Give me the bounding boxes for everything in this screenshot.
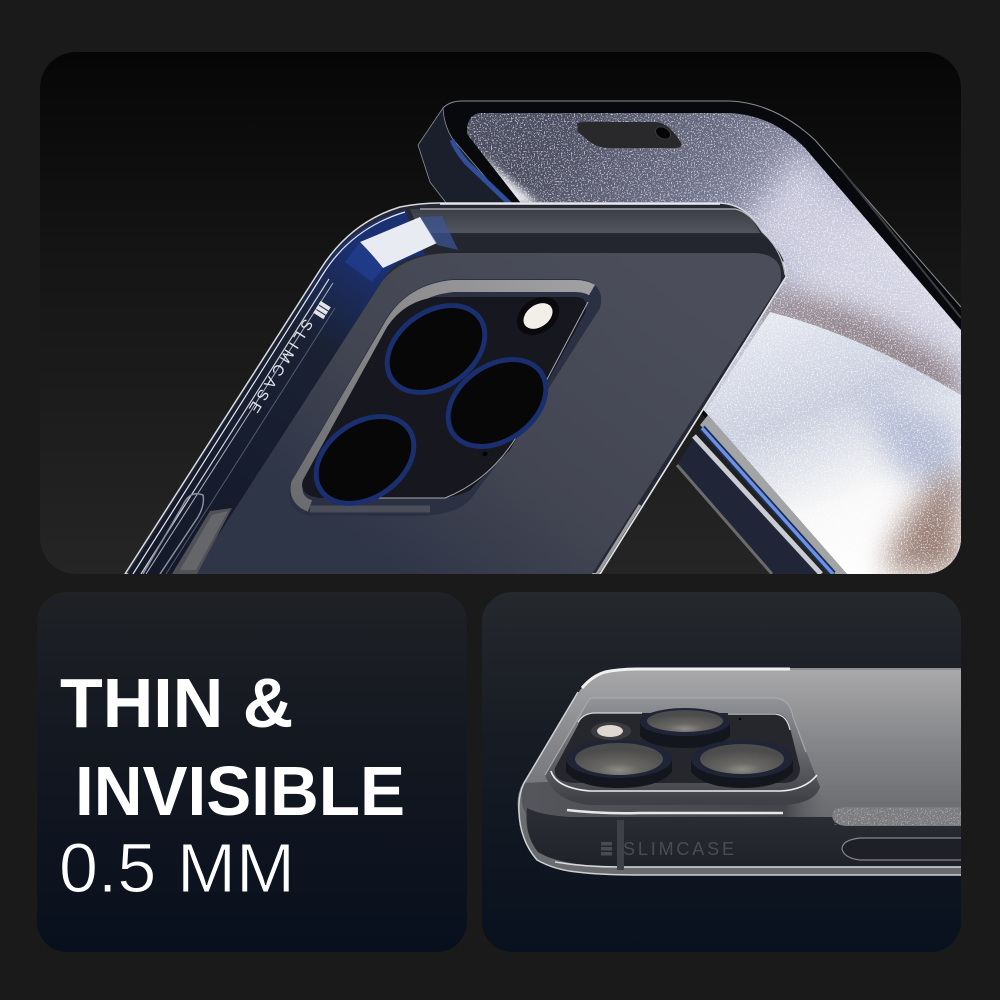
brand on case side	[245, 301, 331, 416]
thickness value: MM	[177, 829, 295, 907]
camera plateau	[545, 698, 820, 805]
case top highlight	[582, 669, 790, 688]
panel: headline text	[37, 592, 467, 952]
flash	[517, 296, 559, 335]
panel: case side close-up	[482, 592, 961, 952]
camera lens 3	[314, 414, 416, 506]
thickness value: 0.5	[59, 829, 156, 907]
phone body	[502, 192, 961, 418]
lens back	[640, 708, 730, 748]
side button cutout	[143, 494, 203, 574]
lens right	[691, 740, 793, 788]
camera lens 2	[446, 357, 548, 449]
microphone dot	[739, 718, 741, 720]
lens left	[566, 740, 672, 788]
microphone dot	[482, 452, 488, 456]
phone side wall	[418, 108, 508, 204]
case side band	[526, 808, 961, 867]
camera lens 1	[384, 303, 488, 395]
brand name: SLIMCASE	[623, 839, 734, 859]
case back body	[518, 669, 961, 875]
camera island	[289, 279, 601, 516]
phone front view	[418, 100, 970, 580]
display notch	[577, 122, 681, 148]
seam line	[617, 820, 624, 870]
brand on case	[601, 839, 734, 859]
clear case on phone back	[125, 203, 786, 574]
case back surface	[193, 253, 781, 574]
panel: hero photo of phone and clear case	[40, 52, 970, 580]
case silhouette	[125, 203, 786, 574]
side highlight	[360, 217, 437, 268]
flash	[591, 722, 631, 740]
phone lower edge	[677, 415, 847, 574]
swoosh	[705, 312, 961, 574]
heading line 1: THIN &	[60, 664, 293, 742]
speckled grip strip	[172, 508, 232, 574]
case top band	[410, 209, 760, 233]
side button cutout	[842, 838, 961, 860]
front camera dot	[655, 126, 671, 140]
speckled grip strip	[832, 807, 961, 826]
case rim lines	[133, 212, 405, 574]
brand icon	[601, 842, 612, 856]
case side band	[128, 210, 425, 574]
camera module	[555, 713, 800, 783]
brand name: SLIMCASE	[245, 316, 316, 416]
heading line 2: INVISIBLE	[75, 752, 405, 830]
phone display	[467, 113, 961, 574]
brand icon	[313, 301, 331, 319]
